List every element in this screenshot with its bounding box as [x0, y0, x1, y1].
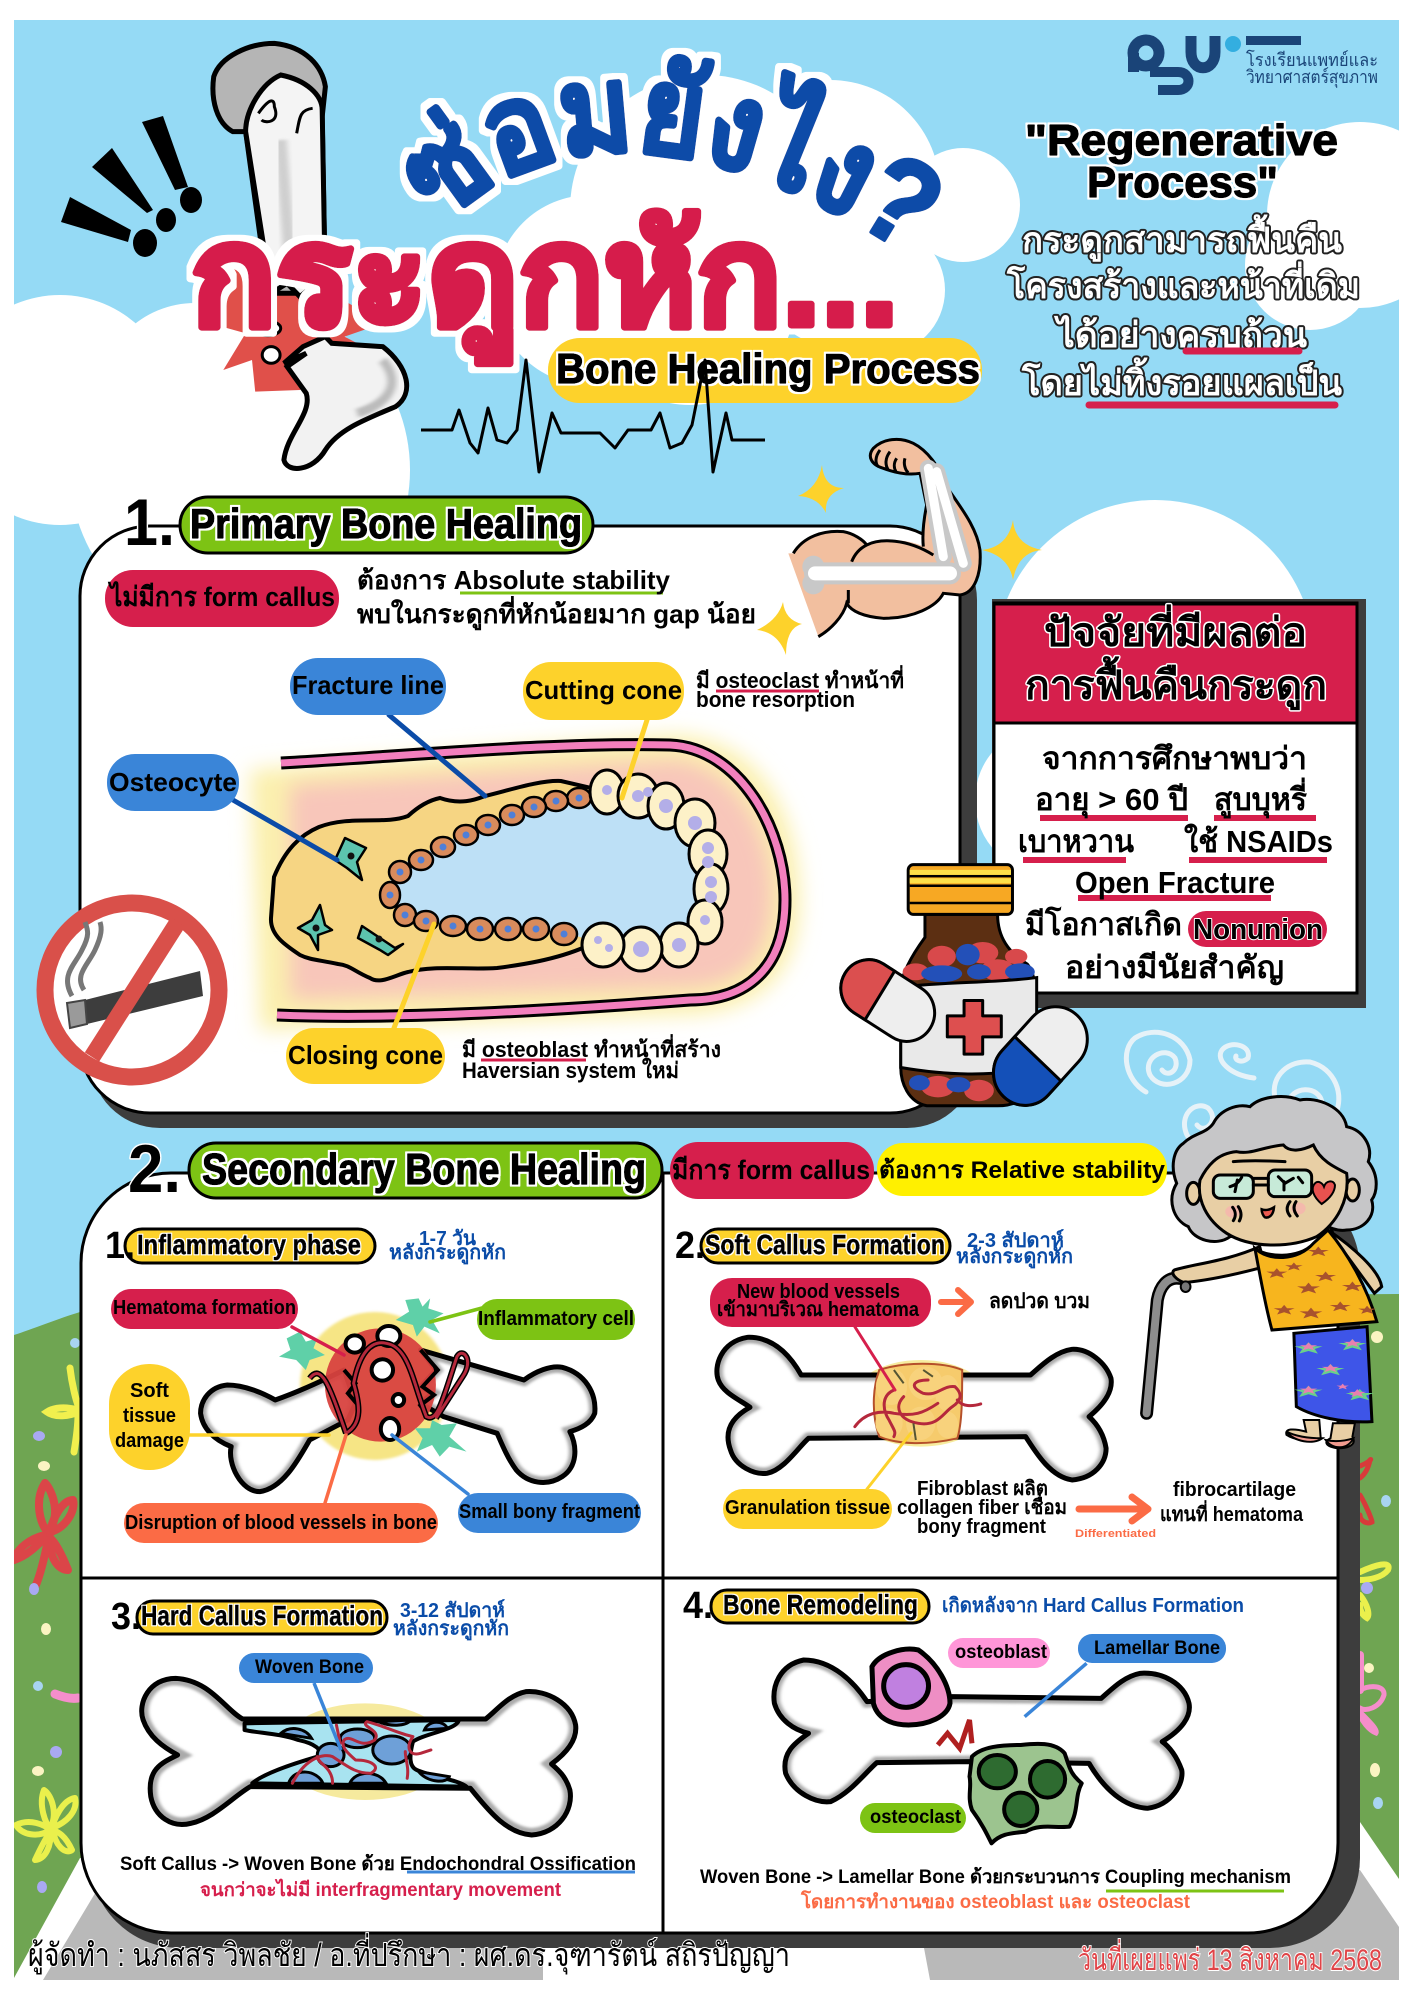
- text: osteoclast note: [696, 664, 904, 712]
- label: lamellar bone: [1078, 1634, 1226, 1663]
- label: new blood vessels: New blood vessels: [737, 1281, 900, 1303]
- road: [14, 1822, 1399, 1980]
- timing: [393, 1599, 509, 1642]
- label: osteocyte: [107, 754, 239, 811]
- icon: spirals of dizziness: [1126, 1032, 1339, 1145]
- label: disruption of blood vessels: Disruption of blood vessels in bone: [125, 1512, 437, 1534]
- header: ปัจจัยที่มีผลต่อ: [1044, 604, 1307, 655]
- cells: lining: [380, 788, 591, 945]
- text: endochondral ossification: จนกว่าจะไม่มี interfragmentary movement: [200, 1878, 562, 1901]
- icon: ECG line: [421, 360, 765, 472]
- text: fibroblast: collagen fiber เชื่อม: [897, 1492, 1067, 1519]
- label: soft tissue damage: Soft: [130, 1380, 169, 1402]
- phase heading: 2.: [675, 1225, 705, 1267]
- text: absolute stability: [357, 565, 756, 631]
- factor list: ใช้ NSAIDs: [1184, 823, 1333, 859]
- pill: forms callus: [670, 1142, 874, 1199]
- text: Regenerative Process: [1006, 116, 1360, 405]
- text: Regenerative Process: โดยไม่ทิ้งรอยแผลเป็น: [1021, 357, 1342, 403]
- label: osteoclast: [860, 1803, 966, 1833]
- factor list: สูบบุหรี่: [1214, 777, 1307, 819]
- label: hematoma: Hematoma formation: [113, 1297, 296, 1319]
- phase heading: 4.: [683, 1585, 713, 1627]
- panel: primary bone healing: [45, 485, 977, 1128]
- road shoulder right: [915, 1870, 1399, 1980]
- factor list: [1018, 741, 1333, 986]
- logo: PSU: วิทยาศาสตร์สุขภาพ: [1246, 67, 1378, 88]
- logo: PSU: [1133, 36, 1378, 90]
- label: closing cone: [286, 1028, 445, 1084]
- phase heading: Hard Callus Formation: [141, 1600, 383, 1631]
- label: fracture line: [290, 658, 446, 715]
- header: [994, 604, 1357, 723]
- text: fibrocartilage: แทนที่ hematoma: [1160, 1499, 1304, 1526]
- label: inflammatory cell: Inflammatory cell: [478, 1308, 634, 1330]
- heading number 2: 2.: [128, 1131, 181, 1207]
- bone with woven bone: [142, 1678, 576, 1835]
- text: fibrocartilage: fibrocartilage: [1173, 1479, 1296, 1501]
- label: disruption of blood vessels: [124, 1503, 438, 1543]
- text: Regenerative Process: โครงสร้างและหน้าที่เดิม: [1006, 261, 1360, 306]
- label: osteocyte: Osteocyte: [109, 767, 237, 797]
- dots left: [29, 1338, 80, 1893]
- label: new blood vessels: เข้ามาบริเวณ hematoma: [717, 1298, 920, 1321]
- label: cutting cone: [523, 662, 684, 720]
- label: cutting cone: Cutting cone: [525, 675, 682, 705]
- phase heading: Soft Callus Formation: [705, 1229, 945, 1260]
- phase heading: Bone Remodeling: [723, 1589, 918, 1620]
- timing: 3-12 สัปดาห์: [400, 1599, 505, 1622]
- label: small bony fragment: Small bony fragment: [459, 1501, 640, 1523]
- panel: secondary bone healing: [81, 1131, 1360, 1948]
- inflammatory cells: [279, 1298, 467, 1457]
- panel: factors affecting healing: [992, 599, 1366, 1008]
- icon: sparkle stars: [757, 465, 1042, 655]
- text: absolute stability: ต้องการ Absolute stability: [357, 565, 671, 595]
- flowers right: [1360, 1459, 1389, 1733]
- head: [1172, 1097, 1376, 1245]
- text: fibroblast: bony fragment: [917, 1516, 1046, 1538]
- text: Regenerative Process: ได้อย่างครบถ้วน: [1053, 314, 1307, 355]
- label: soft tissue damage: tissue: [123, 1405, 176, 1427]
- pill: relative stability: ต้องการ Relative stability: [879, 1157, 1166, 1184]
- icon: exclamation marks: [61, 116, 202, 257]
- callout lines: [190, 1308, 482, 1503]
- icon: medicine bottle with pills: [830, 865, 1100, 1119]
- grass field: [14, 1294, 1399, 1980]
- factor list: อย่างมีนัยสำคัญ: [1065, 950, 1284, 986]
- icon: broken femur: [198, 43, 407, 468]
- pill: relative stability: [877, 1143, 1167, 1196]
- timing: 2-3 สัปดาห์: [967, 1229, 1064, 1252]
- heading pill: Primary Bone Healing: Primary Bone Healing: [190, 500, 582, 547]
- label: closing cone: Closing cone: [288, 1040, 443, 1070]
- factor list: Nonunion: [1193, 914, 1323, 946]
- diagram: cutting and closing cone: [233, 715, 800, 1030]
- label: hematoma: [111, 1289, 298, 1329]
- factor list: มีโอกาสเกิด: [1025, 906, 1182, 942]
- timing: หลังกระดูกหัก: [389, 1242, 506, 1266]
- dots right: [1361, 1331, 1391, 1809]
- footer: authors: ผู้จัดทำ : นภัสสร วิพลชัย / อ.ที่ปรึกษา : ผศ.ดร.จุฑารัตน์ สถิรปัญญา: [28, 1933, 790, 1975]
- body: [1147, 1230, 1382, 1448]
- bone with callus: [717, 1337, 1111, 1480]
- label: soft tissue damage: damage: [115, 1430, 184, 1452]
- cells: osteocytes: [298, 838, 403, 955]
- cells: osteoclasts: [582, 770, 728, 971]
- subpanel 3: hard callus: [111, 1596, 636, 1901]
- text: osteoblast note: Haversian system ใหม่: [462, 1057, 679, 1083]
- phase heading: 1.: [105, 1225, 135, 1267]
- header: การฟื้นคืนกระดูก: [1025, 656, 1327, 710]
- road shoulder left: [43, 1885, 543, 1980]
- factor list: จากการศึกษาพบว่า: [1042, 741, 1307, 776]
- timing: เกิดหลังจาก Hard Callus Formation: [942, 1595, 1244, 1617]
- subtitle pill: Bone Healing Process: [548, 338, 982, 403]
- callout line: [314, 1683, 341, 1750]
- subpanel 2: soft callus: [675, 1225, 1304, 1540]
- label: woven bone: [239, 1653, 373, 1683]
- label: granulation tissue: Granulation tissue: [725, 1497, 890, 1519]
- timing: หลังกระดูกหัก: [956, 1246, 1073, 1270]
- arrow: to pain relief: [941, 1290, 971, 1314]
- phase heading: [675, 1225, 950, 1267]
- text: fibroblast: [897, 1478, 1067, 1538]
- text: Regenerative Process: Process": [1087, 158, 1278, 207]
- pill: forms callus: มีการ form callus: [672, 1155, 870, 1185]
- icon: grandmother with cane: [1147, 1097, 1382, 1448]
- label: osteoblast: osteoblast: [955, 1642, 1048, 1663]
- text: fibroblast: Fibroblast ผลิต: [917, 1478, 1048, 1500]
- text: Regenerative Process: กระดูกสามารถฟื้นคืน: [1022, 214, 1342, 262]
- arrow: differentiated: Differentiated: [1075, 1528, 1156, 1540]
- text: absolute stability: พบในกระดูกที่หักน้อยมาก gap น้อย: [357, 595, 756, 631]
- phase heading: Inflammatory phase: [137, 1229, 361, 1260]
- clouds: [0, 75, 1414, 875]
- label: osteoblast: [948, 1638, 1050, 1668]
- subpanel 1: inflammatory phase: [105, 1225, 641, 1543]
- phase heading: [683, 1585, 929, 1627]
- factor list: อายุ > 60 ปี: [1035, 782, 1188, 819]
- pill: no callus: ไม่มีการ form callus: [107, 581, 335, 612]
- text: coupling mechanism: Woven Bone -> Lamellar Bone ด้วยกระบวนการ Coupling mechanism: [700, 1866, 1291, 1888]
- text: osteoclast note: bone resorption: [696, 687, 855, 712]
- phase heading: [111, 1596, 387, 1638]
- pill: no callus: [105, 570, 339, 627]
- text: osteoblast note: [462, 1033, 721, 1083]
- bone with osteoblast and osteoclast: [774, 1649, 1189, 1843]
- text: endochondral ossification: [120, 1853, 636, 1901]
- label: fracture line: Fracture line: [292, 670, 444, 700]
- text: fibrocartilage: [1160, 1479, 1304, 1526]
- timing: [956, 1229, 1073, 1270]
- text: coupling mechanism: [700, 1866, 1291, 1913]
- heading number 1: 1.: [124, 485, 175, 559]
- broken bone with hematoma: [201, 1312, 595, 1492]
- factor list: เบาหวาน: [1018, 824, 1134, 859]
- icon: no smoking: [45, 903, 219, 1077]
- label: granulation tissue: [723, 1489, 892, 1529]
- timing: [389, 1228, 506, 1266]
- text: Regenerative Process: "Regenerative: [1025, 116, 1338, 165]
- timing: หลังกระดูกหัก: [393, 1618, 509, 1642]
- phase heading: 3.: [111, 1596, 141, 1638]
- flowers left: [14, 1368, 78, 1860]
- text: coupling mechanism: โดยการทำงานของ osteoblast และ osteoclast: [800, 1890, 1191, 1913]
- label: inflammatory cell: [477, 1299, 635, 1340]
- label: small bony fragment: [458, 1493, 641, 1533]
- label: soft tissue damage: [109, 1364, 190, 1470]
- timing: 1-7 วัน: [419, 1228, 476, 1250]
- callout lines: [233, 715, 647, 1028]
- logo: PSU: โรงเรียนแพทย์และ: [1246, 49, 1378, 70]
- text: osteoclast note: มี osteoclast ทำหน้าที่: [696, 664, 904, 693]
- text: endochondral ossification: Soft Callus -> Woven Bone ด้วย Endochondral Ossification: [120, 1853, 636, 1875]
- label: lamellar bone: Lamellar Bone: [1094, 1638, 1220, 1659]
- phase heading: [105, 1225, 375, 1267]
- icon: flexing arm with bone: [788, 439, 980, 637]
- text: osteoblast note: มี osteoblast ทำหน้าที่สร้าง: [462, 1033, 721, 1062]
- subtitle pill: Bone Healing Process: Bone Healing Process: [556, 345, 980, 392]
- arrow: differentiated: [1075, 1497, 1156, 1540]
- subpanel 4: bone remodeling: [683, 1585, 1291, 1913]
- factor list: Open Fracture: [1075, 865, 1275, 900]
- title: how to repair: ซ่อมยังไง?: [400, 48, 941, 242]
- callout lines: [855, 1327, 911, 1489]
- label: osteoclast: osteoclast: [870, 1807, 962, 1828]
- label: new blood vessels: [710, 1278, 931, 1327]
- label: woven bone: Woven Bone: [255, 1657, 364, 1678]
- title: broken bone: กระดูกหัก...: [191, 198, 899, 364]
- heading pill: Secondary Bone Healing: Secondary Bone Healing: [202, 1145, 646, 1194]
- text: reduces pain and swelling: ลดปวด บวม: [989, 1290, 1090, 1313]
